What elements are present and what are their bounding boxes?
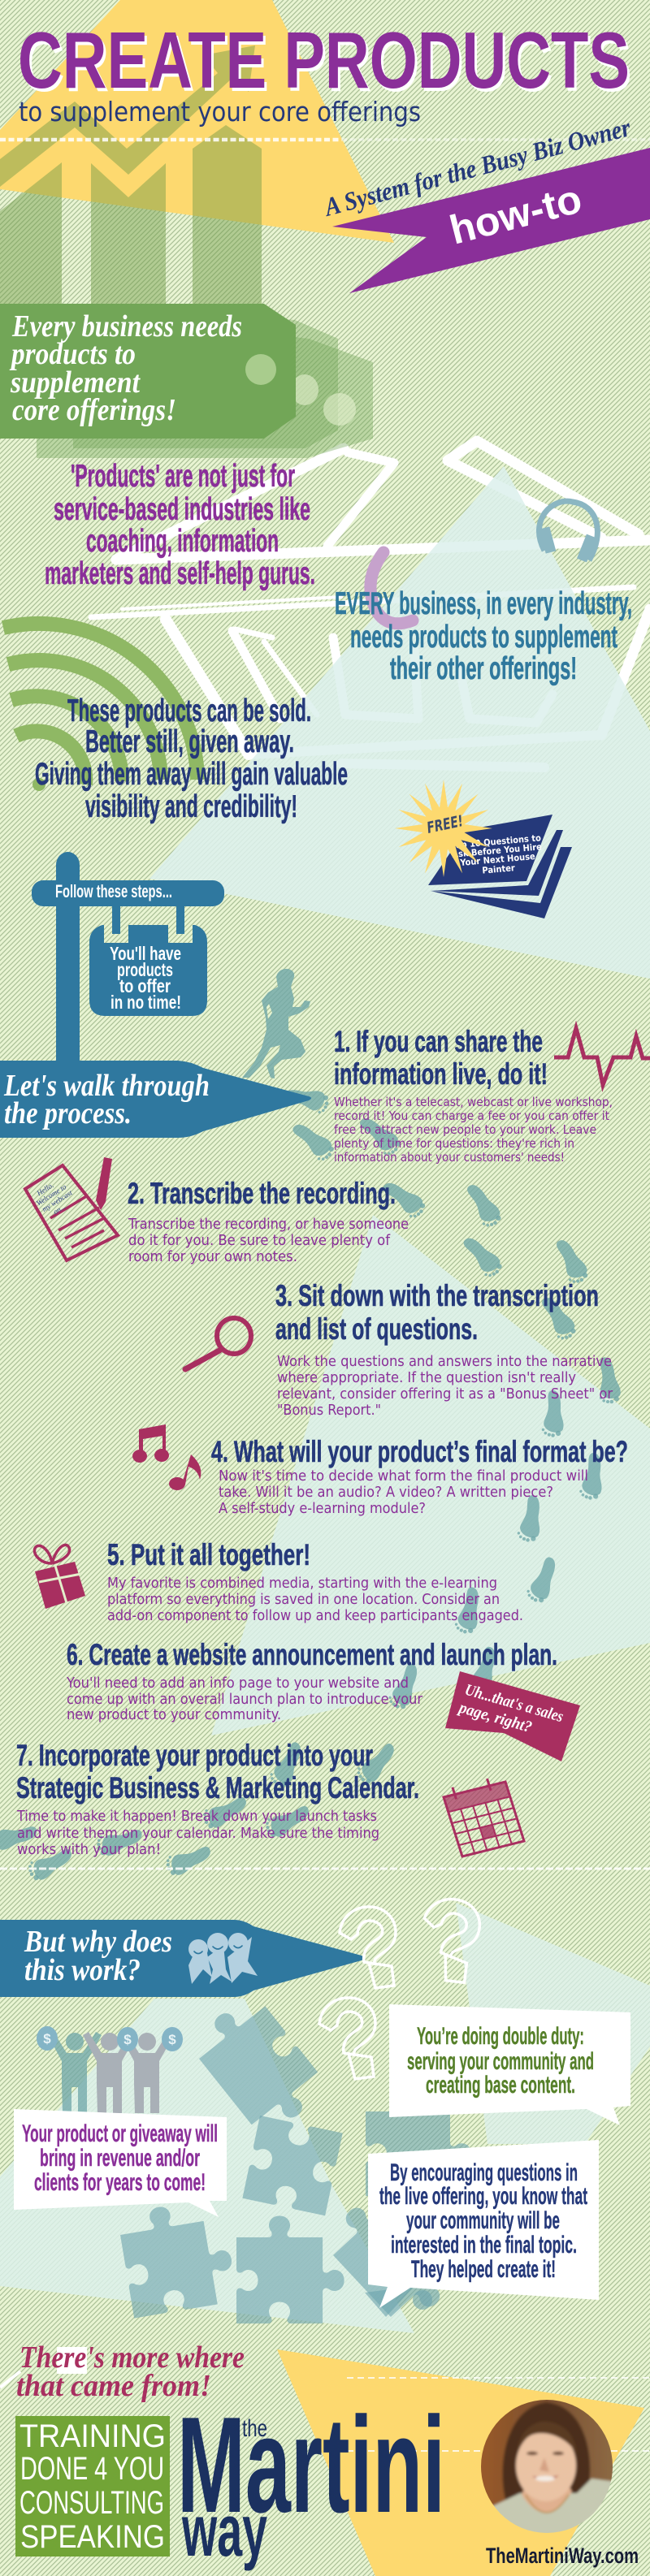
dashed rule — [0, 1868, 650, 1869]
logo: the Martini way: way — [181, 2491, 267, 2572]
icon: transcript page and pen: Welcome to — [35, 1182, 68, 1208]
step 6: new product to your community. — [67, 1706, 281, 1723]
tag text — [9, 309, 242, 427]
step 1: information live, do it! — [334, 1057, 548, 1091]
step 1: 1. If you can share the — [334, 1025, 543, 1058]
text block: can be sold: Better still, given away. — [85, 724, 294, 759]
dashed rule top — [0, 138, 650, 141]
closing line: that came from! — [16, 2369, 211, 2403]
step 5 — [107, 1538, 523, 1624]
step 6 — [66, 1638, 557, 1723]
logo: the Martini way — [177, 2388, 445, 2572]
icon: free report book: Top 10 Questions to — [451, 832, 542, 851]
step 6: come up with an overall launch plan to introduce your — [67, 1691, 422, 1708]
step 5: platform so everything is saved in one location. Consider an — [107, 1591, 500, 1608]
speech bubble: revenue: bring in revenue and/or — [40, 2145, 200, 2172]
step 4: Now it's time to decide what form the final product will — [219, 1467, 588, 1485]
step 2: 2. Transcribe the recording. — [128, 1177, 396, 1210]
note: sales page — [445, 1671, 580, 1761]
step 7: and write them on your calendar. Make sure the timing — [17, 1825, 379, 1842]
banner: but why does this work: this work? — [24, 1953, 141, 1987]
text block: can be sold — [35, 694, 348, 824]
ribbon: how-to: how-to — [445, 175, 587, 253]
text block: products are not just for: coaching, information — [86, 524, 279, 559]
speech bubble: revenue: clients for years to come! — [34, 2169, 206, 2196]
services box — [15, 2416, 170, 2557]
step 4: take. Will it be an audio? A video? A written piece? — [219, 1484, 553, 1501]
step 7: works with your plan! — [17, 1841, 161, 1858]
services box: SPEAKING — [20, 2519, 165, 2555]
banner: let's walk through the process — [0, 1061, 311, 1138]
pale triangle upper — [150, 466, 650, 979]
pale triangle middle — [211, 1215, 650, 1735]
bar chart and rising arrow — [0, 45, 262, 304]
footprints trail — [0, 1080, 621, 1883]
icon: music notes — [132, 1424, 201, 1490]
icon: transcript page and pen: on... — [52, 1202, 67, 1216]
icon: magnifying glass — [185, 1318, 251, 1369]
step 1: information about your customers' needs! — [334, 1150, 565, 1165]
speech bubble: revenue — [14, 2109, 227, 2217]
step 6: You'll need to add an info page to your website and — [66, 1675, 409, 1692]
text block: every business — [335, 586, 632, 686]
note: sales page: Uh...that's a sales — [463, 1681, 566, 1726]
icon: transcript page and pen: my webcast — [41, 1188, 74, 1213]
yellow triangle bottom — [277, 2349, 644, 2576]
speech bubble: revenue: Your product or giveaway will — [22, 2120, 218, 2147]
step 7 — [16, 1739, 419, 1858]
step 1 — [334, 1025, 613, 1165]
step 1: record it! You can charge a fee or you can offer it — [334, 1109, 610, 1123]
signpost: Follow these steps... — [55, 881, 172, 901]
signpost — [32, 852, 224, 1064]
yellow triangle top — [0, 0, 394, 243]
text block: products are not just for: service-based industries like — [54, 492, 310, 527]
dashed rules bottom — [347, 2378, 650, 2451]
step 4 — [211, 1435, 628, 1517]
text block: products are not just for: 'Products' are not just for — [71, 459, 295, 494]
icon: gift box — [34, 1545, 85, 1609]
speech bubble: encouraging questions — [368, 2140, 599, 2308]
text block: can be sold: Giving them away will gain valuable — [35, 757, 348, 792]
step 5: add-on component to follow up and keep participants engaged. — [107, 1607, 523, 1624]
text block: products are not just for: marketers and self-help gurus. — [45, 556, 315, 591]
step 2: do it for you. Be sure to leave plenty of — [128, 1232, 391, 1249]
step 3: Work the questions and answers into the narrative — [277, 1353, 612, 1370]
signpost: You'll have — [110, 943, 181, 964]
step 3: "Bonus Report." — [277, 1402, 381, 1419]
step 1: Whether it's a telecast, webcast or live workshop, — [334, 1095, 613, 1109]
step 7: Strategic Business & Marketing Calendar. — [16, 1771, 419, 1804]
tag text: Every business needs — [11, 309, 242, 344]
icons: people holding money bags: $ — [124, 2032, 132, 2047]
icon: free report book — [395, 780, 572, 918]
step 5: My favorite is combined media, starting with the e-learning — [107, 1575, 497, 1592]
logo: the Martini way: Martini — [177, 2388, 445, 2541]
signpost: in no time! — [110, 992, 181, 1013]
white house scribble — [91, 441, 650, 767]
step 7: Time to make it happen! Break down your launch tasks — [16, 1808, 377, 1825]
step 1: free to attract new people to your work. Leave — [334, 1122, 596, 1137]
step 2 — [128, 1177, 409, 1265]
banner: let's walk through the process: Let's walk through — [3, 1069, 210, 1103]
photo portrait — [481, 2400, 613, 2533]
icons: people holding money bags: $ — [168, 2032, 176, 2047]
icon: telephone handset — [370, 552, 413, 624]
tag text: core offerings! — [12, 393, 176, 427]
icon: runner — [242, 969, 310, 1078]
banner: let's walk through the process: the process. — [4, 1096, 132, 1130]
logo: the Martini way: the — [242, 2415, 267, 2442]
step 3: relevant, consider offering it as a "Bonus Sheet" or — [277, 1385, 613, 1403]
icon: wifi arcs — [3, 624, 197, 791]
icons: people holding money bags — [37, 2026, 183, 2113]
icon: transcript page and pen: Hello. — [35, 1181, 55, 1198]
icon: headphones — [539, 501, 597, 560]
step 2: room for your own notes. — [128, 1248, 297, 1265]
ribbon: how-to — [332, 148, 650, 293]
icons: question marks — [319, 1893, 485, 2079]
pale triangle lower left — [0, 1999, 414, 2333]
closing line — [0, 2340, 245, 2403]
banner: but why does this work — [0, 1920, 364, 1997]
icon: heartbeat line — [554, 1028, 650, 1085]
puzzle pieces — [117, 1990, 471, 2332]
step 4: A self-study e-learning module? — [219, 1500, 426, 1517]
text block: can be sold: These products can be sold. — [67, 694, 311, 728]
pale triangle lower right — [456, 1903, 650, 2144]
step 2: Transcribe the recording, or have someone — [128, 1216, 409, 1233]
step 7: 7. Incorporate your product into your — [16, 1739, 373, 1772]
icon: free report book: FREE! — [425, 812, 465, 837]
step 3: where appropriate. If the question isn't really — [277, 1369, 576, 1386]
services box: DONE 4 YOU — [20, 2451, 164, 2487]
price tags — [0, 304, 373, 458]
icon: calendar — [441, 1774, 524, 1856]
icon: free report book: Ask Before You Hire — [452, 841, 543, 860]
services box: CONSULTING — [20, 2485, 164, 2521]
services box: TRAINING — [20, 2418, 166, 2454]
step 5: 5. Put it all together! — [107, 1538, 310, 1571]
note: sales page: page, right? — [456, 1698, 534, 1736]
text block: products are not just for — [45, 459, 315, 591]
tag text: supplement — [10, 365, 141, 400]
text block: can be sold: visibility and credibility! — [85, 789, 297, 824]
speech bubble: double duty — [389, 2004, 630, 2125]
signpost: to offer — [119, 975, 171, 996]
banner: but why does this work: But why does — [24, 1925, 172, 1959]
icon: free report book: Painter — [482, 862, 515, 876]
step 3 — [275, 1279, 613, 1419]
signpost: products — [117, 959, 173, 980]
icon: transcript page and pen — [25, 1157, 118, 1260]
step 3: and list of questions. — [275, 1312, 478, 1346]
subtitle: to supplement your core offerings — [19, 96, 421, 128]
tag text: products to — [9, 337, 136, 371]
icon: free report book: Your Next House — [459, 851, 536, 868]
icons: people holding money bags: $ — [43, 2031, 51, 2047]
step 1: plenty of time for questions: they're rich in — [334, 1136, 574, 1151]
closing line: There's more where — [20, 2340, 245, 2375]
